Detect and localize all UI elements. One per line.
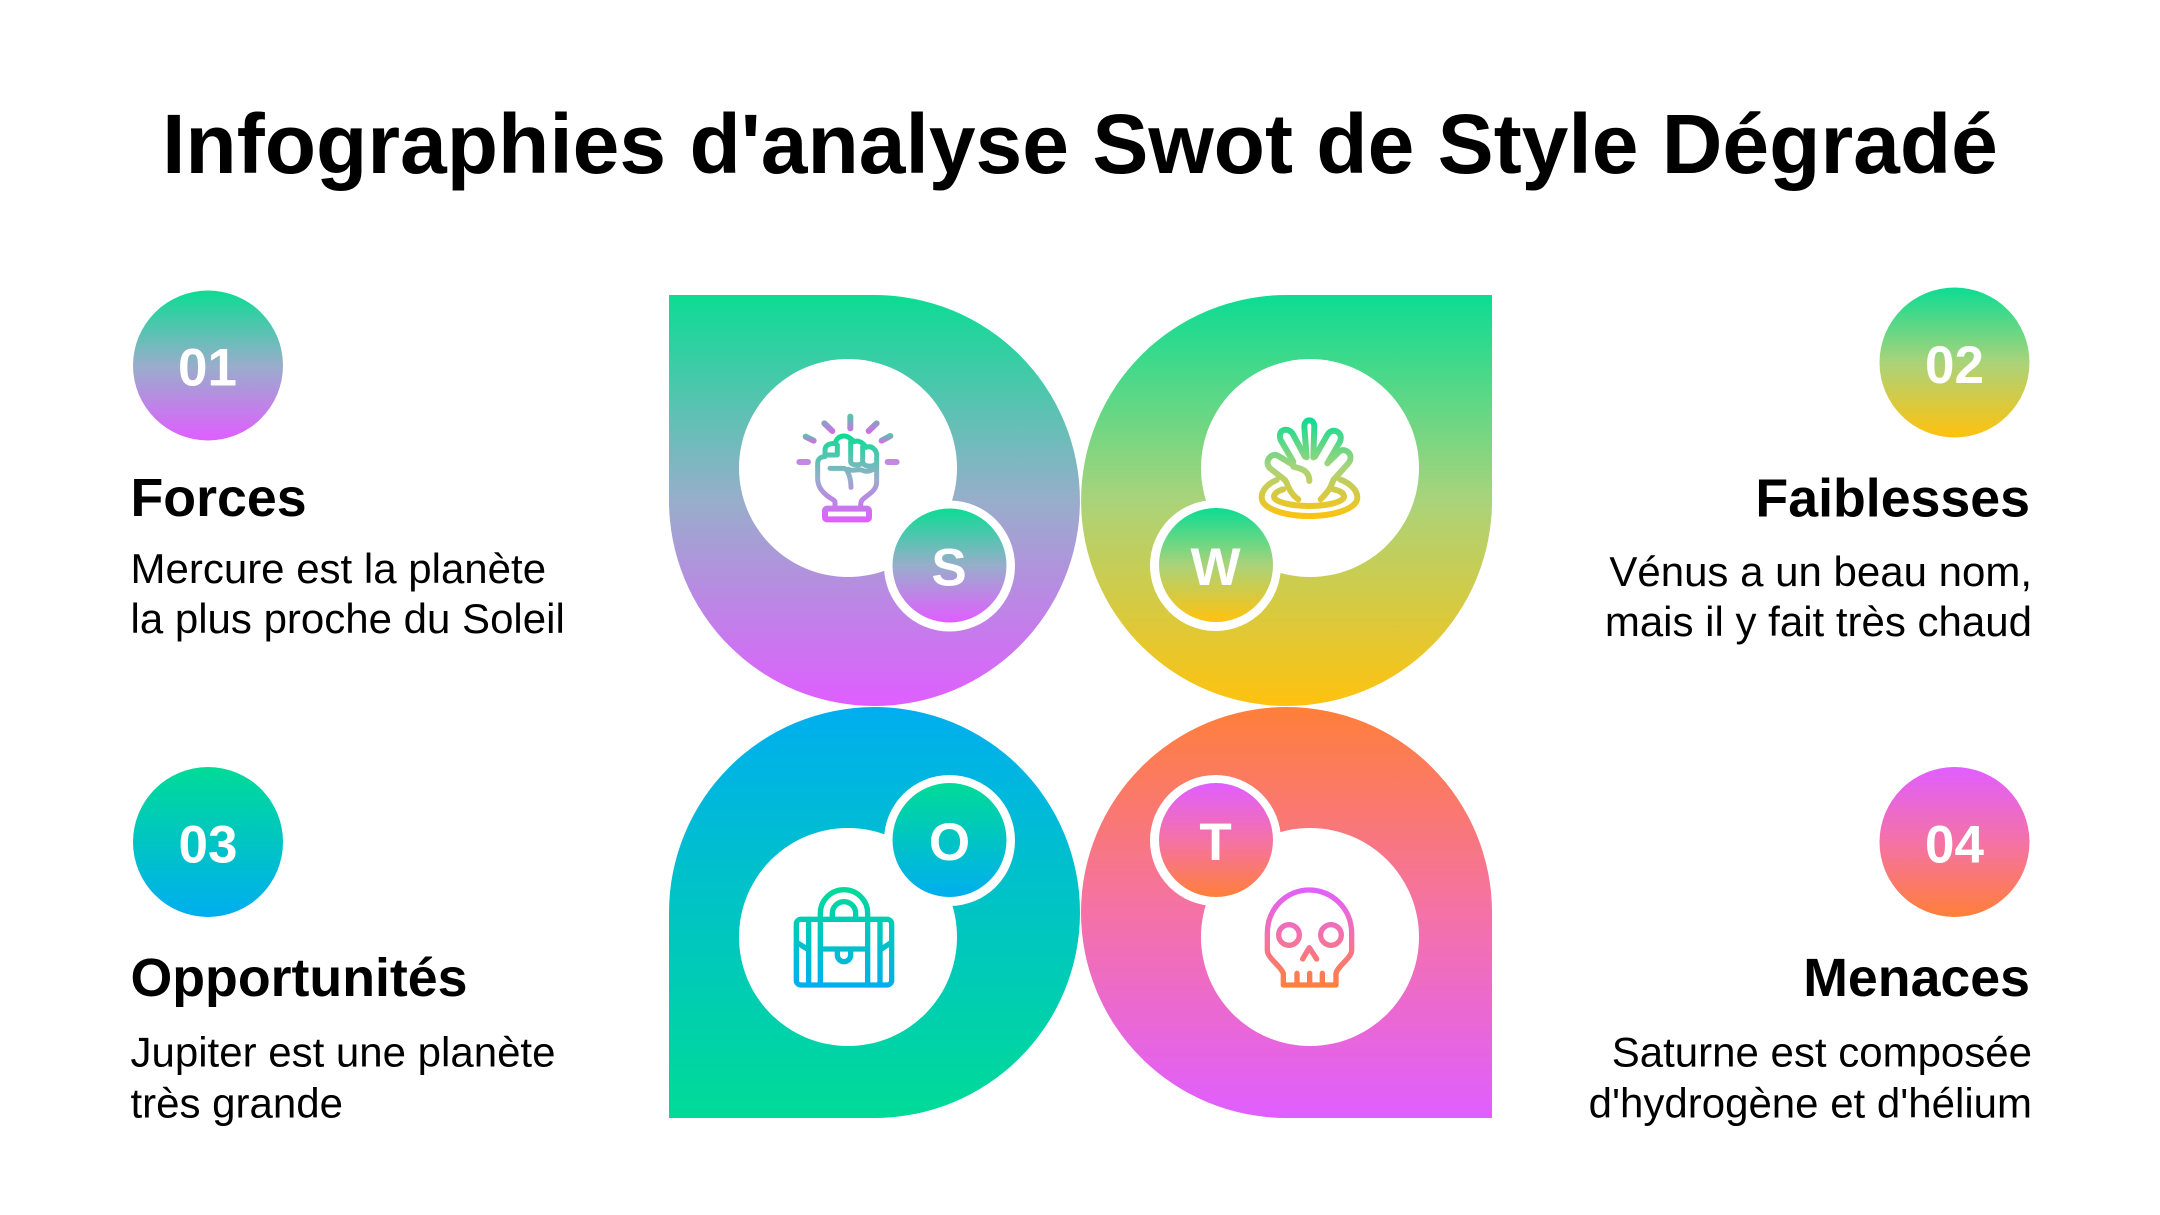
heading: Menaces: Menaces	[1803, 948, 2030, 1008]
number badge 04: 04	[1925, 816, 1984, 874]
description: Menaces: Saturne est composée	[1612, 1028, 2032, 1076]
heading: Opportunités: Opportunités	[130, 948, 468, 1008]
panel: S quadrant	[669, 295, 1080, 706]
S white icon circle	[739, 359, 957, 577]
T letter badge: T	[1199, 813, 1232, 872]
heading: Faiblesses: Faiblesses	[1755, 468, 2030, 528]
panel: Opportunités text block	[130, 767, 555, 1126]
panel: O quadrant	[669, 707, 1080, 1118]
O white icon circle	[739, 828, 957, 1046]
description: Forces: Mercure est la planète	[130, 545, 546, 592]
panel: T quadrant	[1081, 707, 1492, 1118]
icon: skull	[1267, 890, 1352, 985]
panel: Forces text block	[130, 290, 565, 642]
T teardrop shape	[1081, 707, 1492, 1118]
number badge 01	[133, 290, 283, 440]
O letter badge: O	[929, 813, 970, 872]
description: Forces: la plus proche du Soleil	[130, 595, 565, 642]
description: Menaces: d'hydrogène et d'hélium	[1589, 1080, 2032, 1126]
description: Opportunités: Jupiter est une planète	[130, 1028, 555, 1076]
W letter badge	[1150, 500, 1281, 631]
description: Faiblesses: mais il y fait très chaud	[1605, 598, 2032, 645]
icon: sinking hand	[1262, 420, 1357, 516]
T white icon circle	[1201, 828, 1419, 1046]
W letter badge: W	[1190, 538, 1241, 597]
number badge 02	[1880, 288, 2030, 438]
T letter badge	[1150, 775, 1281, 906]
number badge 01: 01	[178, 338, 237, 398]
O letter badge	[884, 775, 1015, 906]
description: Opportunités: très grande	[130, 1080, 343, 1126]
S letter badge: S	[931, 538, 967, 598]
icon: briefcase	[796, 890, 892, 985]
O teardrop shape	[669, 707, 1080, 1118]
number badge 03	[133, 767, 283, 917]
W white icon circle	[1201, 359, 1419, 577]
icon: raised fist	[799, 417, 897, 519]
heading: Forces: Forces	[130, 468, 307, 528]
panel: W quadrant	[1081, 295, 1492, 706]
title: Infographies d'analyse Swot de Style Dégradé	[162, 97, 1998, 191]
number badge 03: 03	[179, 816, 237, 874]
S teardrop shape	[669, 295, 1080, 706]
panel: Faiblesses text block	[1605, 288, 2032, 645]
number badge 04	[1880, 767, 2030, 917]
number badge 02: 02	[1925, 336, 1984, 395]
panel: Menaces text block	[1589, 767, 2032, 1126]
W teardrop shape	[1081, 295, 1492, 706]
description: Faiblesses: Vénus a un beau nom,	[1609, 548, 2032, 595]
S letter badge	[884, 500, 1015, 632]
